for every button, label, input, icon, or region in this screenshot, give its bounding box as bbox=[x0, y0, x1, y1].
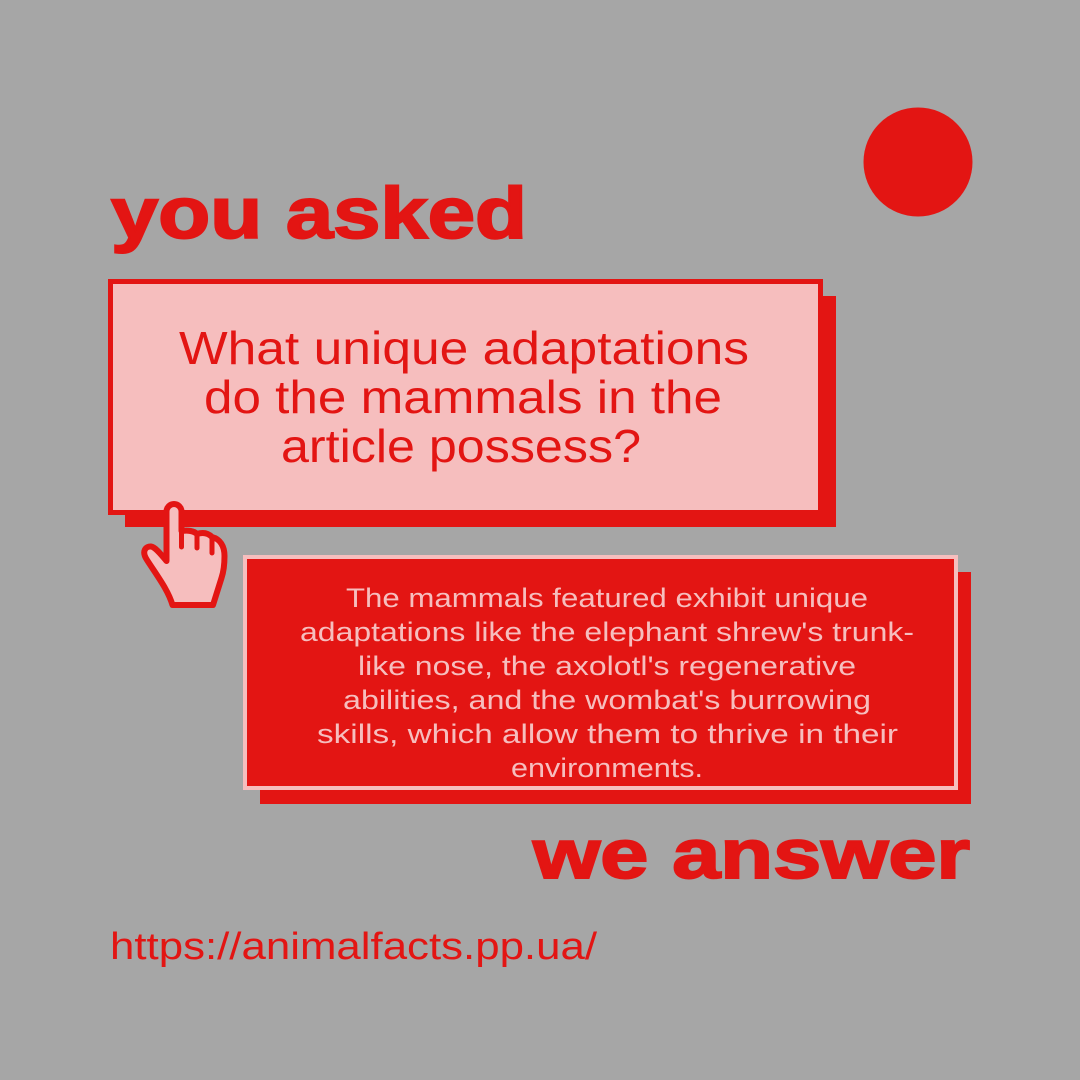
answer text: abilities, and the wombat's burrowing bbox=[343, 685, 871, 715]
heading: we answer: we answer bbox=[532, 815, 970, 893]
question text: article possess? bbox=[281, 420, 641, 472]
heading: you asked: you asked bbox=[111, 174, 527, 254]
answer text: adaptations like the elephant shrew's trunk- bbox=[300, 617, 914, 647]
website url: https://animalfacts.pp.ua/ bbox=[110, 926, 598, 968]
answer text bbox=[300, 583, 914, 783]
answer text: environments. bbox=[511, 753, 703, 783]
question text bbox=[179, 322, 749, 472]
question text: do the mammals in the bbox=[204, 371, 722, 423]
decorative red circle bbox=[864, 108, 972, 216]
panel: answer bbox=[245, 557, 971, 804]
icon: pointing hand bbox=[144, 504, 224, 605]
panel: question bbox=[110, 282, 836, 527]
answer text: like nose, the axolotl's regenerative bbox=[358, 651, 856, 681]
answer text: skills, which allow them to thrive in their bbox=[317, 719, 898, 749]
question text: What unique adaptations bbox=[179, 322, 749, 374]
answer text: The mammals featured exhibit unique bbox=[346, 583, 868, 613]
